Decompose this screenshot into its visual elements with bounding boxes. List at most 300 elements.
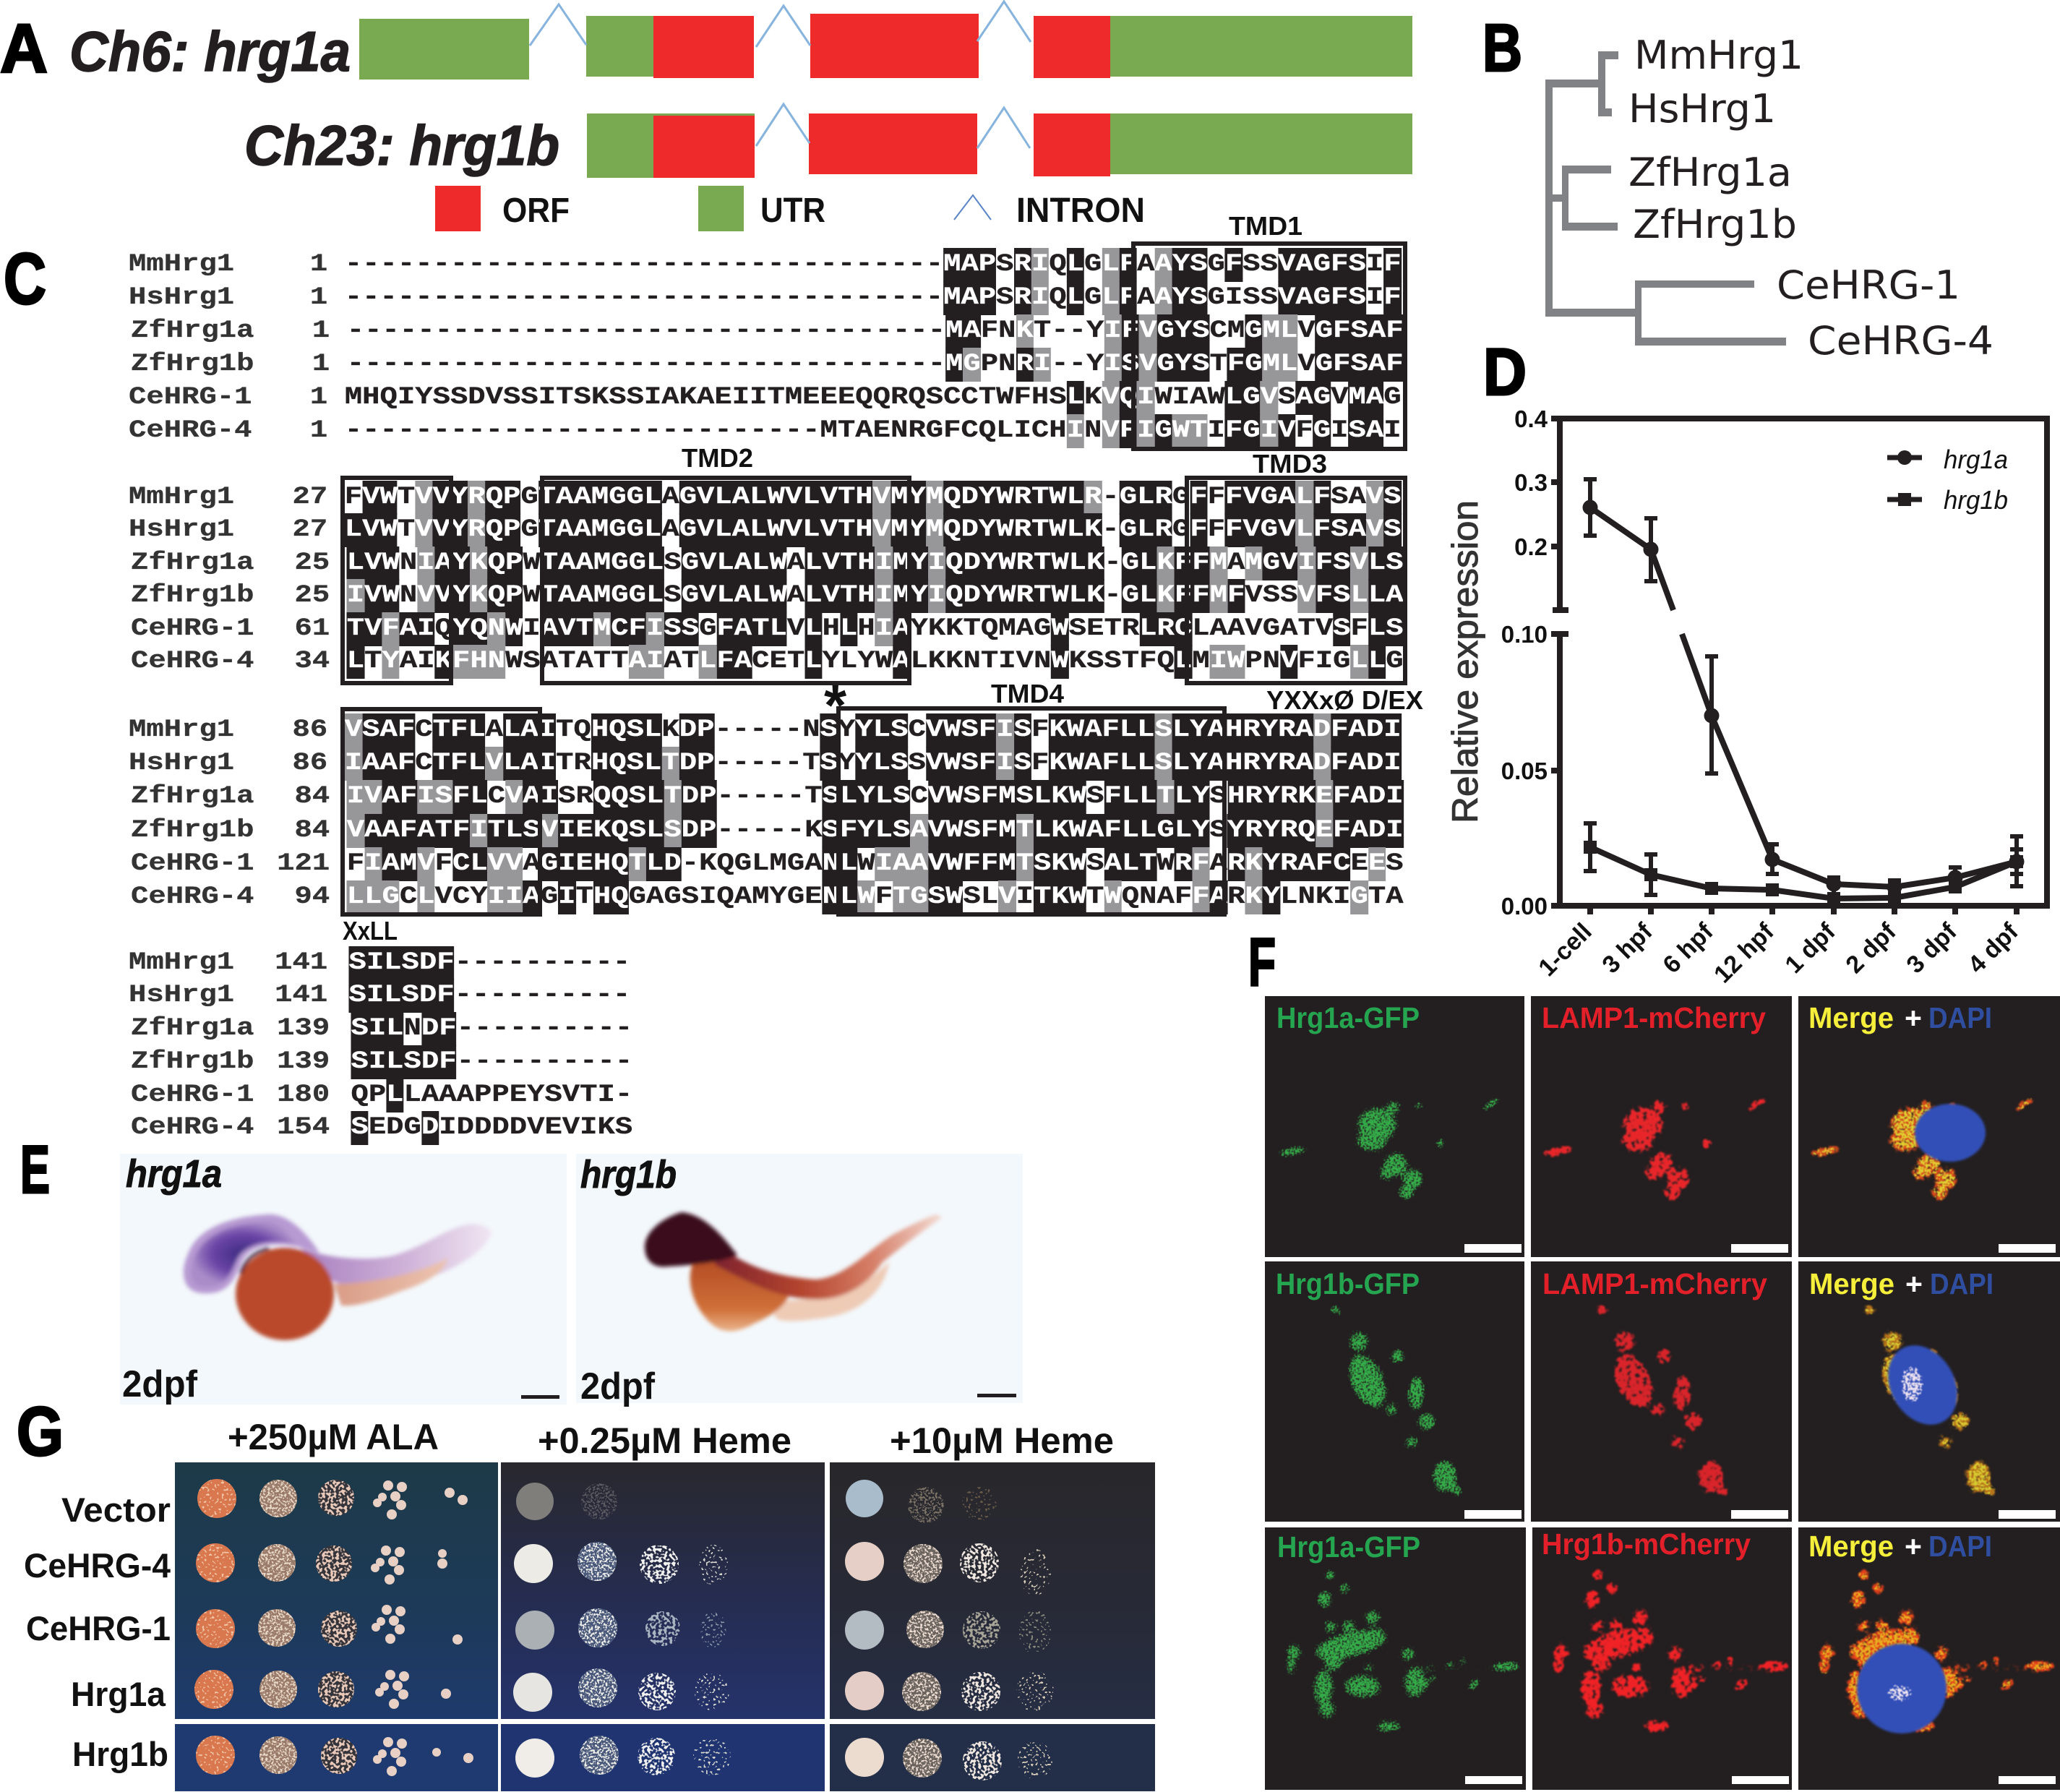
alignment block 2: ZfHrg1a <box>131 549 254 577</box>
alignment block 3: D <box>1313 716 1331 744</box>
alignment block 2: GVLALW <box>682 582 787 609</box>
chart legend: hrg1b <box>1944 485 2008 515</box>
alignment block 3: FLL <box>1104 783 1157 810</box>
alignment block 2: V <box>1280 648 1297 675</box>
alignment block 1: I <box>1137 384 1154 411</box>
line chart: relative expression <box>1445 406 2047 988</box>
x tick labels: 2 dpf <box>1840 917 1902 979</box>
alignment block 2: R <box>468 516 486 544</box>
row 1: Hrg1a-GFP + LAMP1: Hrg1a-GFP <box>1276 1001 1420 1034</box>
alignment block 2: M <box>926 516 943 544</box>
alignment block 2: S <box>1383 484 1402 511</box>
alignment block 4: EDG IDDDDVEVIKS <box>369 1114 632 1141</box>
alignment block 2: W <box>1051 648 1069 675</box>
alignment block 3: FADI <box>1333 817 1404 844</box>
row 1: Hrg1a-GFP + LAMP1: LAMP1-mCherry <box>1542 1001 1766 1034</box>
alignment block 2: FF <box>1175 582 1210 609</box>
alignment block 1: F <box>1122 317 1139 345</box>
alignment block 3: SLYLS <box>823 783 910 810</box>
alignment block 4: ---------- <box>455 949 630 977</box>
alignment block 3: FADI <box>1331 750 1402 777</box>
alignment block 1: F <box>1225 251 1243 278</box>
alignment block 3: FADI <box>1331 716 1402 744</box>
phylogenetic tree: HsHrg1 <box>1628 86 1776 132</box>
alignment block 1: K <box>1016 317 1034 345</box>
alignment block 2: N W S A - A <box>400 549 1245 577</box>
alignment block 2: LS <box>1368 549 1404 577</box>
alignment block 3: CeHRG-1 <box>131 850 254 878</box>
gene model legend <box>435 186 1145 231</box>
alignment block 4: ZfHrg1a <box>131 1015 254 1042</box>
alignment block 4: SILSDF <box>348 982 455 1009</box>
phylogenetic tree: CeHRG-4 <box>1808 318 1994 364</box>
alignment block 3: I <box>996 716 1014 744</box>
alignment block 1: ML <box>1263 317 1297 345</box>
alignment block 1: V <box>1139 351 1156 378</box>
y tick labels: 0.00 <box>1501 893 1548 919</box>
alignment block 3: A <box>910 817 928 844</box>
panel label G: G <box>17 1393 64 1470</box>
alignment block 3: IEKQSL <box>558 817 664 844</box>
alignment block 4: CeHRG-1 <box>131 1081 254 1109</box>
alignment domain frames and labels: YXXxØ D/EX <box>1266 685 1423 715</box>
alignment domain frames and labels: TMD2 <box>682 443 753 473</box>
alignment block 3: ZfHrg1a <box>131 783 254 810</box>
alignment block 2: FF <box>1175 549 1210 577</box>
gene model legend: ORF <box>502 192 570 230</box>
alignment block 1: I <box>1261 417 1278 445</box>
row 2: Hrg1b-GFP + LAMP1: Merge <box>1809 1267 1894 1300</box>
alignment block 1: MA <box>945 317 981 345</box>
alignment block 3: S <box>1014 750 1031 777</box>
row 1: Hrg1a-GFP + LAMP1: Merge <box>1808 1001 1894 1034</box>
alignment block 2: K <box>1157 582 1175 609</box>
alignment block 2: I <box>875 549 893 577</box>
embryo photo hrg1a <box>120 1152 567 1405</box>
alignment block 2: TAAMGGL <box>538 516 661 544</box>
alignment block 1: L <box>1067 251 1084 278</box>
alignment block 1: M <box>945 351 963 378</box>
column titles: +0.25µM Heme <box>538 1420 791 1461</box>
alignment block 1: FG <box>1227 351 1263 378</box>
alignment block 2: M <box>593 615 611 643</box>
plate +0.25uM Heme <box>501 1462 825 1791</box>
alignment block 2: FS <box>1316 582 1351 609</box>
alignment block 4 <box>129 946 632 1145</box>
alignment block 1: ML <box>1263 351 1297 378</box>
alignment block 3: I <box>470 817 488 844</box>
alignment block 3: F <box>1192 883 1210 911</box>
panel label F: F <box>1248 924 1276 1000</box>
alignment block 1: L <box>1067 384 1084 411</box>
alignment block 3: V <box>417 850 435 878</box>
alignment block 1: 1 <box>312 351 330 378</box>
alignment block 1: A <box>1154 284 1172 312</box>
alignment block 3: 84 <box>295 783 330 810</box>
panel label A: A <box>0 10 48 87</box>
y tick labels: 0.3 <box>1514 469 1548 496</box>
x tick labels: 3 hpf <box>1597 917 1658 979</box>
alignment block 2: M <box>1245 549 1263 577</box>
row labels: Hrg1a <box>71 1675 166 1713</box>
alignment block 1: A <box>1154 251 1172 278</box>
alignment block 1: ---------------------------MTAENRGFCQLICH N I F I I <box>345 417 1402 445</box>
label 2dpf: 2dpf <box>580 1366 656 1407</box>
chart legend: hrg1a <box>1944 445 2008 474</box>
alignment block 3: KWAFLL <box>1049 750 1155 777</box>
alignment block 1: MmHrg1 <box>129 251 234 278</box>
alignment block 3: VWFFM <box>928 850 1016 878</box>
alignment block 3: LYAHRYRA <box>1172 716 1313 744</box>
alignment block 2: I <box>928 582 945 609</box>
alignment block 2: 61 <box>295 615 330 643</box>
alignment block 3: 121 <box>277 850 330 878</box>
alignment block 4: HsHrg1 <box>129 982 234 1009</box>
y tick labels: 0.2 <box>1514 533 1548 560</box>
alignment block 3: QQSL <box>593 783 664 810</box>
alignment block 3: SFYLS <box>823 817 910 844</box>
alignment block 1: I <box>1104 317 1122 345</box>
alignment block 1: F <box>1383 251 1402 278</box>
alignment block 2: W <box>1051 615 1069 643</box>
alignment block 2: L <box>699 648 716 675</box>
alignment block 3: F F A -KQGLMGA W S W A E S <box>347 850 1404 878</box>
alignment block 3: AM <box>382 850 417 878</box>
alignment block 3: GIEHQ <box>541 850 629 878</box>
alignment block 1: R <box>1014 284 1031 312</box>
alignment block 1: V <box>1139 317 1156 345</box>
alignment block 3: LY <box>1175 783 1210 810</box>
alignment block 2: QP <box>488 549 523 577</box>
alignment block 2: F T G A - G F SA <box>345 484 1366 511</box>
alignment block 2: QDYWRTWLK <box>943 516 1102 544</box>
alignment block 2: L <box>1368 648 1386 675</box>
alignment block 2: V <box>1351 549 1368 577</box>
alignment block 3: AAF <box>362 750 415 777</box>
alignment block 2: IW <box>1210 648 1245 675</box>
alignment block 1: L <box>1102 284 1120 312</box>
alignment block 2: Q I G V H H YKKTQMAG SETR LAAVGATV F <box>435 615 1368 643</box>
alignment block 2: VW <box>362 484 398 511</box>
alignment block 3: S <box>664 817 682 844</box>
alignment block 3: YLS <box>855 750 908 777</box>
alignment block 1: MA <box>1348 384 1383 411</box>
alignment block 2: 27 <box>293 484 327 511</box>
row 3: Hrg1a-GFP + Hrg1b-mCherry: Hrg1a-GFP <box>1277 1530 1420 1564</box>
alignment block 3: V <box>505 783 523 810</box>
alignment block 1: GYS <box>1156 317 1210 345</box>
alignment block 4: ---------- <box>455 982 630 1009</box>
x tick labels: 1 dpf <box>1780 917 1841 979</box>
series hrg1a <box>1583 479 2024 894</box>
alignment block 3: HRYRK <box>1227 783 1316 810</box>
alignment block 3: V <box>347 817 364 844</box>
alignment block 3: YLS <box>855 716 908 744</box>
alignment block 2: V <box>873 484 890 511</box>
alignment block 3: V <box>486 750 503 777</box>
alignment block 1: G <box>1313 417 1331 445</box>
alignment block 2: LS <box>1368 615 1404 643</box>
alignment block 3: V <box>541 817 558 844</box>
alignment block 2: K <box>1157 549 1175 577</box>
alignment block 4: L <box>386 1081 404 1109</box>
row labels: CeHRG-1 <box>26 1609 171 1647</box>
panel label B: B <box>1482 10 1522 85</box>
phylogenetic tree: CeHRG-1 <box>1777 262 1960 308</box>
alignment block 1: ZfHrg1b <box>131 351 254 378</box>
row labels: Hrg1b <box>72 1735 168 1773</box>
alignment block 1 <box>129 248 1404 448</box>
alignment block 1: 1 <box>312 317 330 345</box>
alignment block 1: F <box>1120 284 1137 312</box>
alignment block 3: LD <box>646 850 682 878</box>
alignment block 3: FADI <box>1333 783 1404 810</box>
alignment block 1: ---------------------------------- S Q G A G SS I <box>345 251 1383 278</box>
alignment block 2: ZfHrg1b <box>131 582 254 609</box>
alignment block 4: D <box>421 1114 439 1141</box>
alignment block 4: 141 <box>275 982 327 1009</box>
alignment block 2: S <box>1383 516 1402 544</box>
alignment block 2: MY <box>893 549 928 577</box>
alignment block 2: L <box>1295 516 1313 544</box>
alignment block 2: QP <box>486 516 520 544</box>
alignment block 4: SILSDF <box>348 949 455 977</box>
alignment block 2: LVTH <box>804 549 875 577</box>
alignment block 2: GVLALW <box>682 549 787 577</box>
alignment block 3: VWSF <box>926 716 996 744</box>
x tick labels: 12 hpf <box>1709 917 1780 988</box>
label hrg1a: hrg1a <box>126 1152 222 1196</box>
alignment block 1: 1 <box>310 284 327 312</box>
alignment block 2: GL <box>1122 549 1157 577</box>
alignment block 1: ---------------------------------- PN --Y T V <box>347 351 1316 378</box>
alignment block 2: 27 <box>293 516 327 544</box>
alignment block 3: C SR -----T C S S <box>488 783 1227 810</box>
alignment block 2: F <box>382 615 400 643</box>
alignment block 1: F <box>1383 284 1402 312</box>
alignment block 3: T <box>629 850 646 878</box>
alignment block 1: ZfHrg1a <box>131 317 254 345</box>
panel label E: E <box>20 1131 50 1207</box>
alignment block 3: S <box>820 716 838 744</box>
alignment block 1: I <box>1034 351 1051 378</box>
alignment block 2: TV <box>347 615 382 643</box>
row 3: Hrg1a-GFP + Hrg1b-mCherry: + <box>1905 1530 1922 1563</box>
row 1: Hrg1a-GFP + LAMP1: DAPI <box>1928 1001 1992 1034</box>
alignment block 2: R <box>468 484 486 511</box>
alignment block 1: WT <box>1172 417 1208 445</box>
alignment block 1: MHQIYSSDVSSITSKSSIAKAEIITMEEEQQRQSCCTWFHS K WIAW S V G <box>345 384 1402 411</box>
panel label C: C <box>4 239 46 320</box>
yeast spot assay <box>24 1417 1155 1791</box>
alignment block 1: YS <box>1172 284 1208 312</box>
alignment block 4: SIL <box>351 1015 404 1042</box>
row labels: Vector <box>61 1491 171 1529</box>
alignment block 3: YRAFC <box>1263 850 1351 878</box>
alignment block 3: TG <box>893 883 928 911</box>
alignment block 1: I <box>1067 417 1084 445</box>
alignment block 1: HsHrg1 <box>129 284 234 312</box>
phylogenetic tree <box>1545 33 1994 364</box>
alignment block 2: R <box>1084 484 1102 511</box>
alignment block 3: HQ <box>593 883 629 911</box>
alignment block 2: QP <box>486 484 520 511</box>
x tick labels: 1-cell <box>1533 918 1597 982</box>
alignment block 2: V <box>873 516 890 544</box>
alignment block 3: SKW <box>1034 850 1086 878</box>
alignment block 3: E <box>1368 850 1386 878</box>
x tick labels: 3 dpf <box>1901 917 1962 979</box>
alignment block 3: HQSL <box>591 750 661 777</box>
y tick labels: 0.10 <box>1501 621 1548 648</box>
alignment block 2: CeHRG-4 <box>131 648 254 675</box>
alignment block 3: AAFATF <box>364 817 470 844</box>
alignment block 1: Q <box>1120 384 1137 411</box>
alignment block 2: MY <box>893 582 928 609</box>
alignment block 3: R <box>1227 850 1245 878</box>
alignment block 3: 86 <box>293 716 327 744</box>
alignment block 3: MmHrg1 <box>129 716 234 744</box>
alignment block 1: YS <box>1172 251 1208 278</box>
alignment block 3: VV <box>488 850 523 878</box>
alignment block 3: ZfHrg1b <box>131 817 254 844</box>
alignment block 2: FVGV <box>1225 516 1295 544</box>
alignment block 3: SAF <box>362 716 415 744</box>
alignment domain frames and labels: TMD1 <box>1229 211 1302 241</box>
alignment block 2: M <box>1210 549 1227 577</box>
alignment block 3: LYAHRYRA <box>1172 750 1313 777</box>
alignment block 3: KWAFLL <box>1049 716 1155 744</box>
gene model hrg1b <box>244 104 1412 178</box>
alignment block 2: I <box>646 615 664 643</box>
alignment block 1: L <box>1102 251 1120 278</box>
alignment block 2: V <box>1366 484 1383 511</box>
alignment block 3: D <box>1313 750 1331 777</box>
alignment block 2: M <box>1210 582 1227 609</box>
y tick labels: 0.4 <box>1514 406 1548 432</box>
alignment block 2: I <box>875 582 893 609</box>
alignment block 2: T AI WSATATT AT CET YLYW LKKNTIVN KSSTFQ M PN FIG G <box>364 648 1404 675</box>
alignment block 2: CF <box>611 615 646 643</box>
alignment block 4: 154 <box>277 1114 330 1141</box>
alignment block 1: R <box>1014 251 1031 278</box>
alignment block 2: FVGA <box>1225 484 1295 511</box>
alignment block 3: LLG <box>347 883 400 911</box>
row 3: Hrg1a-GFP + Hrg1b-mCherry: Hrg1b-mCherry <box>1542 1527 1751 1561</box>
alignment block 4: 139 <box>277 1048 330 1076</box>
alignment block 1: MAP <box>943 284 996 312</box>
alignment block 1: V <box>1102 384 1120 411</box>
alignment block 2: FS <box>1316 549 1351 577</box>
alignment block 2: AY <box>435 549 470 577</box>
alignment block 4: ZfHrg1b <box>131 1048 254 1076</box>
alignment domain frames and labels: * <box>824 673 847 737</box>
x tick labels <box>1533 917 2024 988</box>
alignment block 2: GLR <box>1120 484 1172 511</box>
alignment block 4: ---------- <box>457 1048 632 1076</box>
alignment block 3: C VCY G T GAGSIQAMYGE F SL I T QNAF R LNKI TA <box>400 883 1404 911</box>
alignment block 3: Y <box>1263 883 1280 911</box>
alignment block 2: L <box>1175 648 1192 675</box>
alignment block 1: G <box>1154 417 1172 445</box>
alignment block 3: W <box>857 883 875 911</box>
panel label D: D <box>1483 335 1527 409</box>
alignment block 3: K <box>1245 850 1263 878</box>
alignment block 2: YQ <box>452 615 488 643</box>
alignment block 3: CeHRG-4 <box>131 883 254 911</box>
alignment block 1: VAGFS <box>1278 251 1366 278</box>
label: Ch6 hrg1a: Ch6: hrg1a <box>69 20 351 83</box>
alignment block 2: LRC <box>1139 615 1192 643</box>
alignment block 3: NL <box>823 850 857 878</box>
alignment block 4: SILSDF <box>351 1048 457 1076</box>
alignment block 3: LAI <box>503 750 556 777</box>
series hrg1b <box>1584 823 2023 905</box>
alignment block 2: FATL <box>716 615 787 643</box>
alignment block 2: 25 <box>295 549 330 577</box>
alignment block 3: YRYRQ <box>1227 817 1316 844</box>
alignment block 3: LKWAFLLGLY <box>1034 817 1210 844</box>
label 2dpf: 2dpf <box>122 1363 198 1405</box>
phylogenetic tree: ZfHrg1b <box>1633 202 1797 247</box>
alignment block 3: S <box>820 750 838 777</box>
alignment block 3: TLS <box>488 817 541 844</box>
alignment block 2: S <box>1333 615 1351 643</box>
alignment block 2: VY <box>435 582 470 609</box>
alignment block 2: MY <box>890 516 926 544</box>
row 2: Hrg1b-GFP + LAMP1: LAMP1-mCherry <box>1542 1267 1767 1300</box>
x tick labels: 4 dpf <box>1962 917 2024 979</box>
alignment block 3: DP <box>682 783 716 810</box>
alignment block 2: K <box>435 648 452 675</box>
alignment block 2: LVTH <box>804 582 875 609</box>
alignment block 2: AI <box>629 648 664 675</box>
alignment block 2: AI <box>400 615 435 643</box>
alignment block 2: I <box>347 582 364 609</box>
alignment block 2: GLR <box>1120 516 1172 544</box>
alignment block 3: NL <box>823 883 857 911</box>
alignment block 1: G <box>963 351 981 378</box>
plate +10uM Heme <box>830 1462 1155 1791</box>
alignment block 1: I <box>1031 251 1049 278</box>
row 1: Hrg1a-GFP + LAMP1: + <box>1905 1001 1922 1034</box>
alignment block 3: I <box>558 883 576 911</box>
alignment block 1: FG <box>1225 417 1261 445</box>
plate +250uM ALA <box>175 1462 498 1791</box>
alignment block 4: N ---------- <box>404 1015 632 1042</box>
alignment block 1: CeHRG-4 <box>129 417 252 445</box>
alignment block 3: E <box>1316 783 1333 810</box>
alignment block 1: V <box>1261 384 1278 411</box>
alignment block 1: CeHRG-1 <box>129 384 252 411</box>
alignment block 3: VWSF <box>926 750 996 777</box>
alignment block 2: TAAMGGL <box>541 549 664 577</box>
alignment block 1: SA <box>1348 417 1383 445</box>
embryo photo hrg1b <box>576 1153 1023 1407</box>
alignment block 3: T <box>661 750 679 777</box>
alignment block 1: LG <box>1225 384 1261 411</box>
column titles <box>228 1417 1114 1461</box>
alignment block 4: 139 <box>277 1015 330 1042</box>
alignment block 2: VY <box>433 516 468 544</box>
alignment block 2: I <box>417 549 435 577</box>
x tick labels: 6 hpf <box>1657 917 1719 979</box>
alignment block 2: L <box>804 615 823 643</box>
row 2: Hrg1b-GFP + LAMP1: Hrg1b-GFP <box>1276 1267 1420 1300</box>
alignment block 1: R <box>1016 351 1034 378</box>
alignment block 1: L <box>1067 284 1084 312</box>
alignment block 2: LA <box>1368 582 1404 609</box>
